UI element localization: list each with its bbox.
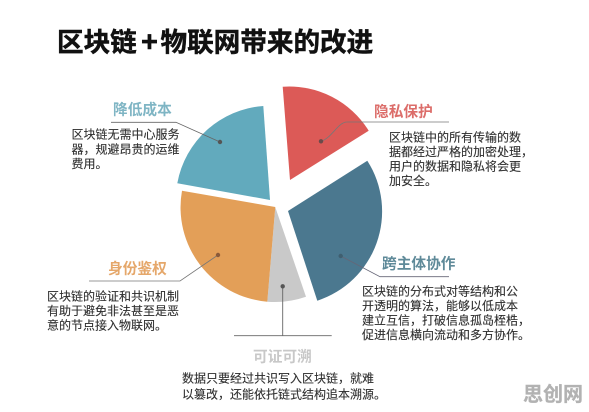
text: collaboration: 区块链的分布式对等结构和公 <box>362 284 518 298</box>
pie chart <box>177 86 382 302</box>
connector: privacy <box>319 122 449 144</box>
wedge: privacy <box>283 86 369 180</box>
wedge: identity <box>181 191 275 302</box>
text: collaboration: 建立互信，打破信息孤岛桎梏， <box>362 312 530 328</box>
text: cost: 费用。 <box>72 157 108 171</box>
connector: collaboration <box>338 254 449 277</box>
watermark: 思创网 <box>523 383 583 406</box>
text: traceability: 以篡改，还能依托链式结构追本溯源。 <box>182 386 386 402</box>
text: identity: 有助于避免非法甚至是恶 <box>47 303 179 318</box>
text: cost: 器，规避昂贵的运维 <box>72 142 180 156</box>
text: traceability: 数据只要经过共识写入区块链，就难 <box>182 370 374 386</box>
title: 区块链 <box>57 28 137 58</box>
heading: collaboration: 跨主体协作 <box>382 254 456 272</box>
heading: identity: 身份鉴权 <box>108 260 167 278</box>
text: privacy: 区块链中的所有传输的数 <box>389 130 521 144</box>
wedge: cost <box>177 106 270 200</box>
text: identity: 意的节点接入物联网。 <box>47 318 167 332</box>
connector: cost <box>111 122 222 144</box>
wedge: traceability <box>267 207 306 302</box>
heading: cost: 降低成本 <box>113 100 172 118</box>
text: collaboration: 促进信息横向流动和多方协作。 <box>362 327 530 342</box>
heading: privacy: 隐私保护 <box>374 104 433 120</box>
text: privacy: 据都经过严格的加密处理， <box>389 144 533 159</box>
title: + <box>141 26 158 58</box>
text: privacy: 用户的数据和隐私将会更 <box>389 158 521 174</box>
connector: traceability <box>234 284 332 336</box>
text: collaboration: 开透明的算法，能够以低成本 <box>362 298 518 313</box>
text: identity: 区块链的验证和共识机制 <box>47 288 179 304</box>
text: cost: 区块链无需中心服务 <box>72 126 180 142</box>
title: 物联网带来的改进 <box>160 28 373 58</box>
wedge: collaboration <box>288 161 382 301</box>
heading: traceability: 可证可溯 <box>253 348 312 366</box>
text: privacy: 加安全。 <box>389 173 437 188</box>
connector: identity <box>89 253 220 281</box>
